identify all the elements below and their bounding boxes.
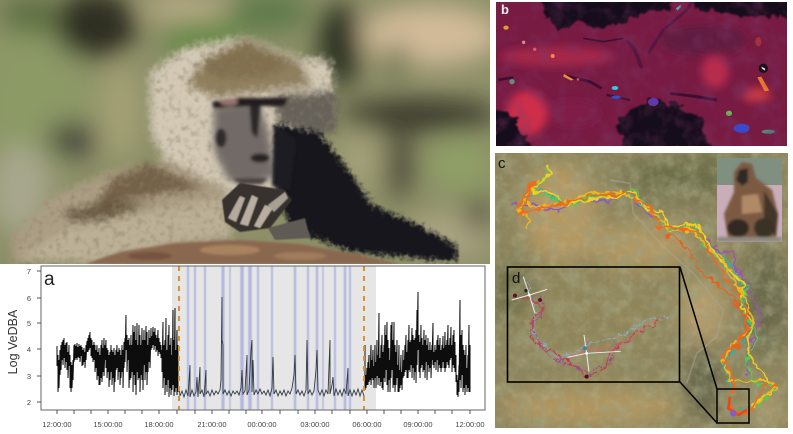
- y axis label: Log VeDBA: [6, 309, 20, 374]
- panel letter c: c: [498, 155, 506, 172]
- x axis time labels: [42, 420, 485, 429]
- y axis numbers: 7: [27, 267, 31, 276]
- panel letter a: a: [44, 269, 55, 290]
- thermal speckle on animals: [503, 5, 775, 134]
- x axis time labels: 09:00:00: [403, 420, 433, 429]
- y axis numbers: 3: [27, 372, 31, 381]
- y axis ticks: [37, 271, 41, 402]
- trace: night baseline with spikes: [179, 297, 364, 397]
- warm ground patches: [493, 0, 790, 150]
- trace: daytime activity after waking: [365, 292, 470, 397]
- panel a: VeDBA time series chart: [0, 264, 490, 434]
- y axis numbers: 6: [27, 294, 31, 303]
- x axis time labels: 03:00:00: [300, 420, 330, 429]
- baboon face: [212, 98, 296, 190]
- baboon shaded dark side: [276, 124, 456, 262]
- baboon fur silhouette: [12, 36, 338, 263]
- map terrain: [490, 153, 790, 427]
- x axis time labels: 06:00:00: [352, 420, 382, 429]
- y axis numbers: 5: [27, 319, 31, 328]
- small locator box: [717, 389, 749, 423]
- photo background: blurred savanna: [0, 0, 500, 257]
- cool shaded trees and shadows: [493, 0, 790, 150]
- y axis numbers: 2: [27, 398, 31, 407]
- panel letter b: b: [501, 2, 509, 17]
- movement tracks: [513, 165, 777, 417]
- river line: [610, 180, 723, 383]
- panel d: zoomed tracks inset: [508, 267, 680, 382]
- x axis time labels: 12:00:00: [455, 420, 485, 429]
- zoom connector lines: [680, 267, 717, 423]
- panel b: thermal drone image: [493, 0, 790, 150]
- rock: [85, 240, 400, 264]
- panel: baboon photograph: [0, 0, 500, 264]
- white direction crosses: [512, 277, 621, 372]
- panel c: satellite map with movement tracks: [490, 153, 790, 428]
- y axis numbers: 4: [27, 345, 31, 354]
- y axis numbers: [27, 267, 31, 407]
- trace: daytime activity before sleep: [57, 308, 178, 397]
- x axis ticks: [57, 410, 470, 414]
- panel letter d: d: [512, 270, 520, 287]
- shadow streaks: [498, 0, 717, 100]
- chart frame: [41, 266, 485, 410]
- x axis time labels: 18:00:00: [144, 420, 174, 429]
- inset baboon photo: [717, 158, 782, 242]
- x axis time labels: 21:00:00: [197, 420, 227, 429]
- night shading: [172, 266, 376, 410]
- x axis time labels: 15:00:00: [93, 420, 123, 429]
- x axis time labels: 00:00:00: [247, 420, 277, 429]
- baboon hand: [222, 183, 310, 240]
- x axis time labels: 12:00:00: [42, 420, 72, 429]
- sleep bouts: blue vertical bands: [188, 266, 350, 410]
- sunset and sunrise dashed orange lines: [179, 266, 364, 410]
